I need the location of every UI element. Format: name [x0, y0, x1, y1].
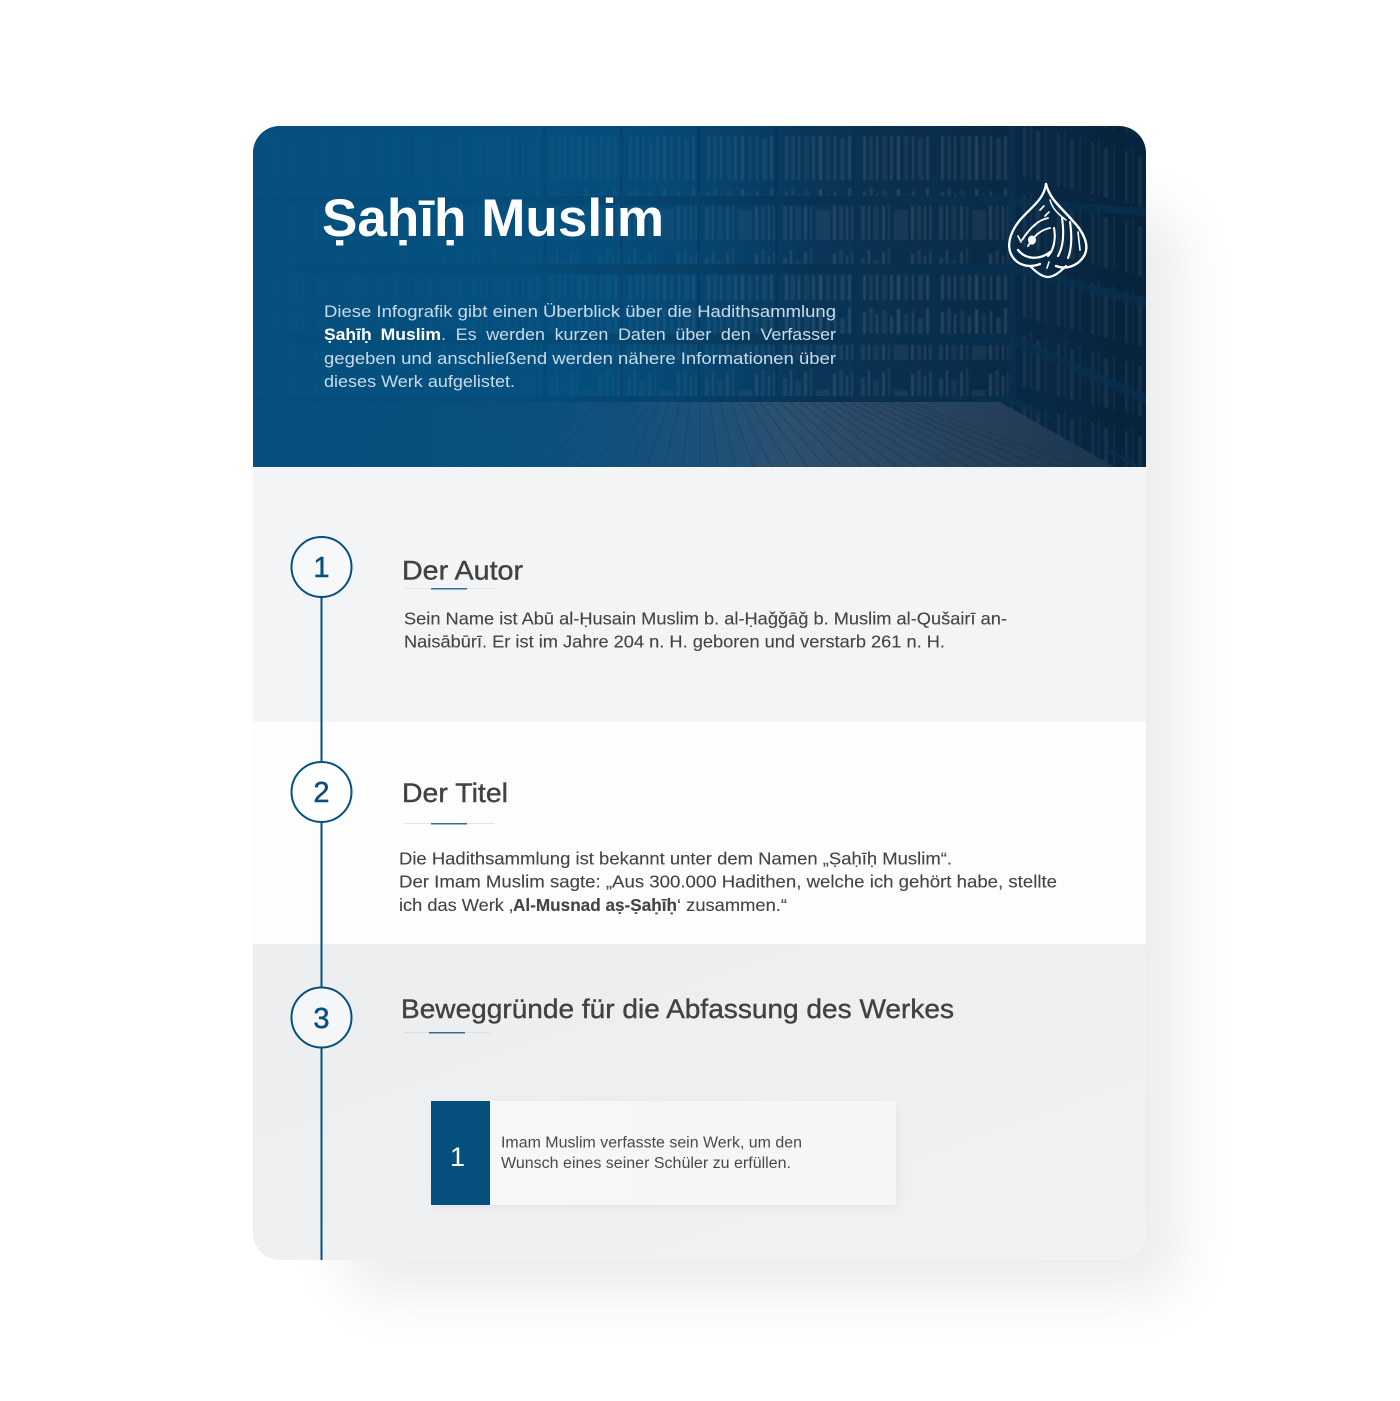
text: author biography: Sein Name ist Abū al-Ḥusain Muslim b. al-Ḥaǧǧāǧ b. Muslim al-Qušairī an-	[404, 608, 1007, 628]
title: Ṣaḥīḥ Muslim	[322, 189, 664, 248]
intro text block: dieses Werk aufgelistet.	[324, 372, 515, 391]
reason text	[501, 1134, 802, 1172]
infographic card	[196, 126, 1146, 1260]
intro text block: gegeben und anschließend werden nähere Informationen über	[324, 349, 836, 368]
reason number badge	[431, 1101, 490, 1205]
text: title description: ich das Werk ‚	[399, 895, 513, 915]
circle marker 2	[292, 762, 352, 822]
heading: Der Titel: Der Titel	[402, 778, 508, 808]
reason text: Imam Muslim verfasste sein Werk, um den	[501, 1134, 802, 1152]
step 2: der Titel	[292, 762, 1057, 915]
intro text block: . Es werden kurzen Daten über den Verfasser	[441, 325, 836, 344]
icon: calligraphic logo	[1009, 184, 1086, 277]
heading: Beweggründe: Beweggründe für die Abfassung des Werkes	[401, 994, 954, 1024]
wooden floor	[556, 402, 1114, 467]
circle marker 3	[292, 988, 352, 1048]
heading underline	[404, 1032, 490, 1034]
panel: section 3 background	[253, 944, 352, 1260]
text: title description: Al-Musnad aṣ-Ṣaḥīḥ	[513, 895, 677, 915]
text: title description	[399, 848, 1057, 915]
intro text block: Ṣaḥīḥ Muslim	[324, 325, 441, 344]
circle marker 1	[292, 537, 352, 597]
circle marker 1: 1	[313, 552, 330, 584]
timeline line	[320, 590, 322, 1260]
intro text block	[324, 302, 836, 391]
heading underline	[404, 588, 497, 590]
card drop shadow	[345, 210, 1180, 1295]
panel: section 2 background	[349, 722, 1146, 944]
reason text: Wunsch eines seiner Schüler zu erfüllen.	[501, 1155, 791, 1172]
text: title description: ‘ zusammen.“	[677, 895, 787, 915]
step 3: Beweggründe	[292, 988, 954, 1207]
intro text block: Diese Infografik gibt einen Überblick über die Hadithsammlung	[324, 302, 836, 321]
step 1: der Autor	[292, 537, 1007, 652]
heading: Der Autor: Der Autor	[402, 556, 523, 586]
circle marker 3: 3	[313, 1003, 330, 1035]
reason number badge: 1	[450, 1142, 465, 1172]
circle marker 2: 2	[313, 777, 330, 809]
text: title description: Der Imam Muslim sagte: „Aus 300.000 Hadithen, welche ich gehört habe, stellte	[399, 872, 1057, 892]
text: author biography	[404, 608, 1007, 652]
reason card 1	[431, 1101, 897, 1207]
panel: section 1 background	[253, 467, 1146, 722]
panel: header with library background	[196, 126, 1146, 474]
text: title description: Die Hadithsammlung ist bekannt unter dem Namen „Ṣaḥīḥ Muslim“.	[399, 848, 952, 868]
text: author biography: Naisābūrī. Er ist im Jahre 204 n. H. geboren und verstarb 261 n. H.	[404, 632, 945, 652]
heading underline	[404, 823, 494, 824]
